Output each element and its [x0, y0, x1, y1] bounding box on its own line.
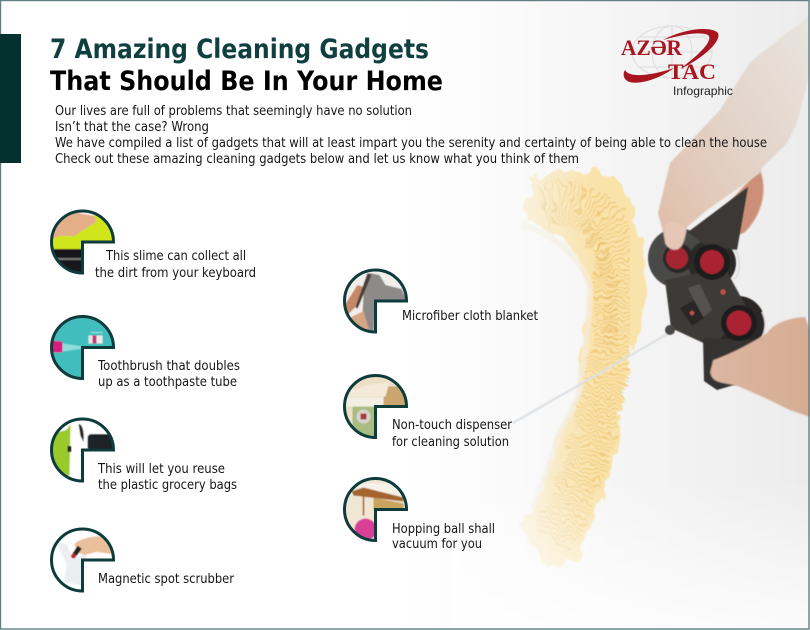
intro paragraph: [55, 104, 767, 167]
logo globe: [632, 26, 712, 78]
label: dispenser: Non-touch dispenser: [392, 418, 513, 433]
photo: lower background fade: [450, 330, 810, 630]
logo caption: Infographic: [673, 84, 733, 98]
label: scrubber: Magnetic spot scrubber: [98, 572, 235, 587]
label: hopping ball: vacuum for you: [392, 537, 482, 552]
icon: slime on keyboard: [50, 210, 116, 275]
label: hopping ball: [392, 522, 495, 552]
label: slime: the dirt from your keyboard: [95, 266, 256, 281]
icon: grocery bag holder: [50, 418, 116, 482]
accent bar: [0, 34, 21, 163]
label: toothbrush: [97, 359, 240, 390]
label: dispenser: [392, 418, 513, 450]
label: slime: This slime can collect all: [105, 249, 246, 264]
photo: game controller: [648, 187, 768, 390]
icon: magnetic scrubber: [50, 528, 114, 592]
label: toothbrush: up as a toothpaste tube: [98, 375, 237, 390]
logo: AZERTAC: [621, 26, 733, 98]
photo: lower hand: [710, 317, 810, 417]
intro paragraph: Isn’t that the case? Wrong: [55, 120, 209, 135]
label: hopping ball: Hopping ball shall: [392, 522, 495, 537]
label: blanket: Microfiber cloth blanket: [402, 309, 538, 324]
logo word AZƏR: AZƏR: [621, 35, 683, 60]
photo: wire antenna: [513, 332, 671, 423]
icon: hopping ball vacuum: [344, 478, 408, 542]
title: [50, 34, 443, 97]
icon: non-touch dispenser: [344, 374, 410, 438]
intro paragraph: Check out these amazing cleaning gadgets below and let us know what you think of them: [55, 152, 579, 167]
photo: mop head: [518, 170, 647, 567]
logo swoosh: [624, 29, 718, 83]
icon: toothbrush: [50, 316, 114, 380]
title line 1: 7 Amazing Cleaning Gadgets: [50, 34, 429, 65]
label: slime: [95, 249, 256, 281]
label: toothbrush: Toothbrush that doubles: [97, 359, 240, 374]
logo word TAC: TAC: [668, 59, 716, 84]
photo: upper arm and hand: [658, 15, 810, 250]
title line 2: That Should Be In Your Home: [50, 66, 443, 97]
label: grocery bags: This will let you reuse: [97, 462, 225, 477]
label: grocery bags: [97, 462, 237, 493]
label: dispenser: for cleaning solution: [392, 435, 509, 450]
label: grocery bags: the plastic grocery bags: [98, 478, 237, 493]
icon: microfiber blanket: [344, 269, 408, 333]
photo: fingers behind controller: [722, 170, 764, 241]
intro paragraph: Our lives are full of problems that seemingly have no solution: [55, 104, 412, 119]
